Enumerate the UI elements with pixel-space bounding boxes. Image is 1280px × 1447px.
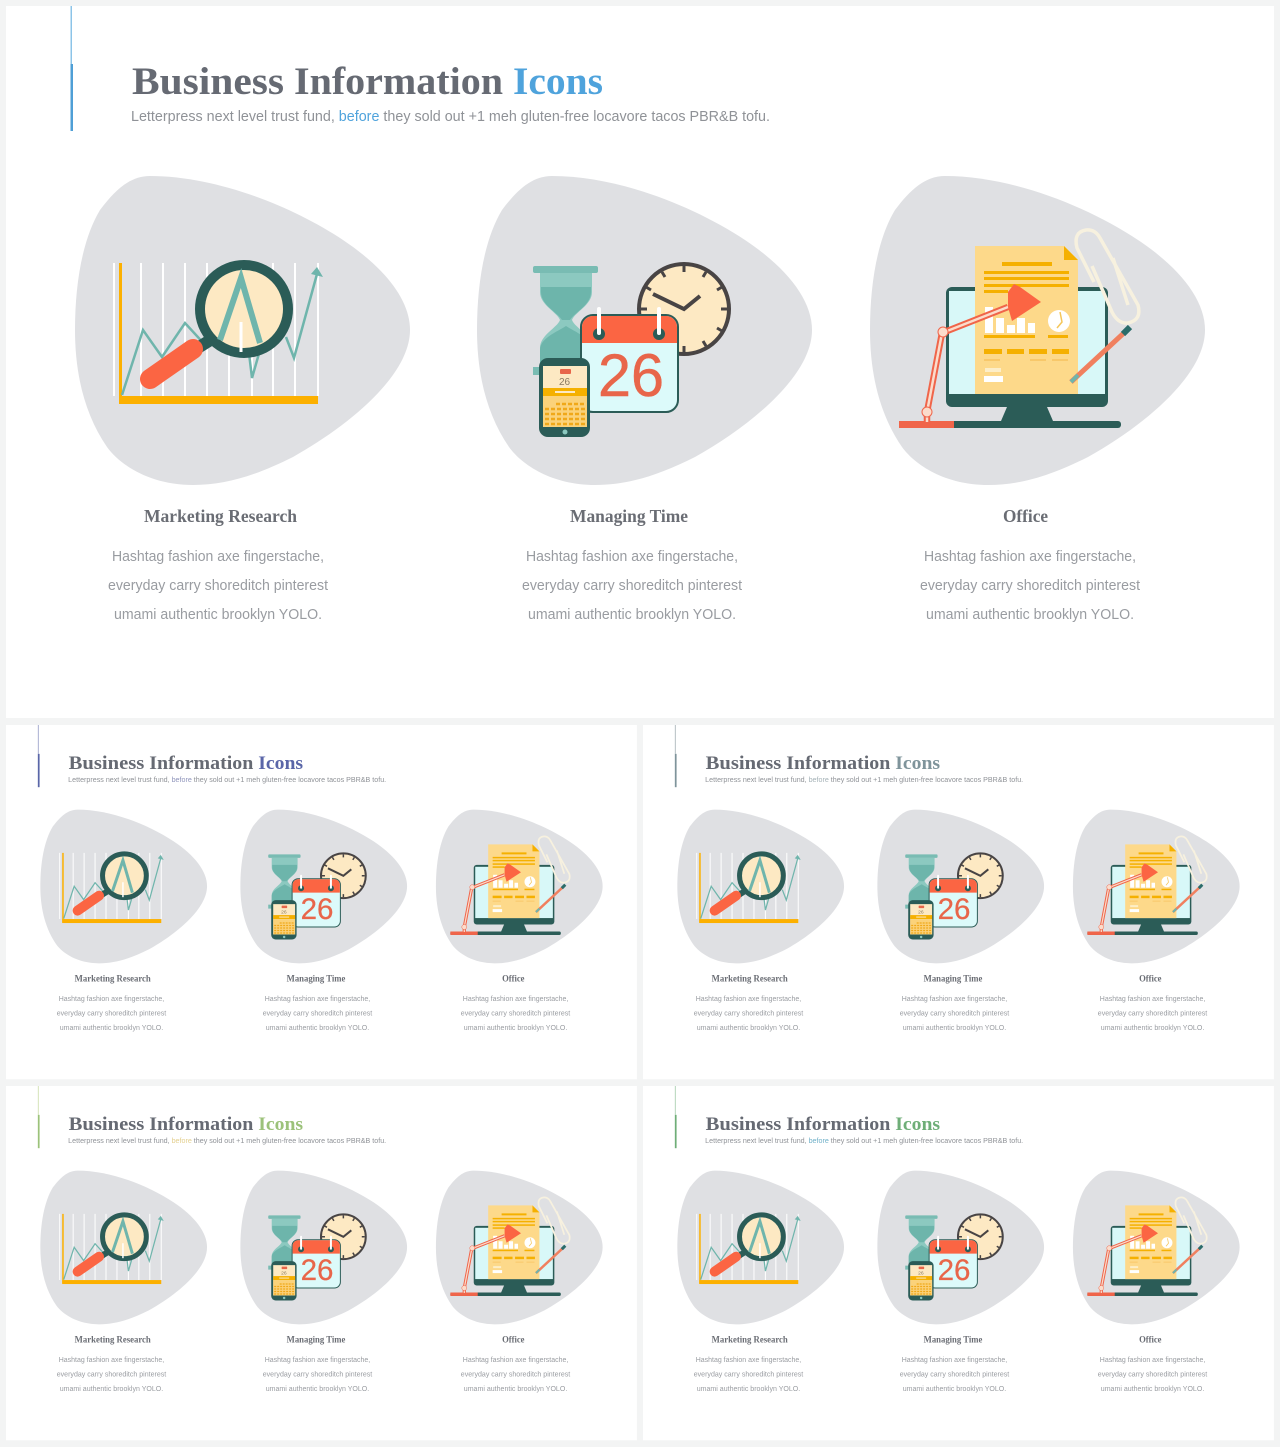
- text block: marketing research: umami authentic brooklyn YOLO.: [60, 1023, 163, 1032]
- text block: office: everyday carry shoreditch pinterest: [1098, 1009, 1207, 1018]
- text block: office: Hashtag fashion axe fingerstache,: [463, 994, 568, 1003]
- text block: managing time: umami authentic brooklyn YOLO.: [528, 607, 736, 623]
- text block: managing time: Hashtag fashion axe fingerstache,: [265, 994, 370, 1003]
- heading: office: Office: [1003, 506, 1048, 526]
- title: Icons: [895, 1114, 941, 1135]
- text block: marketing research: [694, 1355, 803, 1393]
- text block: office: [461, 994, 570, 1032]
- icon: managing time: [477, 176, 812, 485]
- text block: managing time: everyday carry shoreditch pinterest: [900, 1009, 1009, 1018]
- icon: managing time: 26: [281, 910, 287, 916]
- text block: marketing research: everyday carry shoreditch pinterest: [57, 1370, 166, 1379]
- icon: office: [870, 176, 1205, 485]
- text block: marketing research: everyday carry shoreditch pinterest: [694, 1009, 803, 1018]
- text block: managing time: Hashtag fashion axe fingerstache,: [526, 549, 738, 565]
- icon: managing time: 26: [559, 377, 571, 388]
- heading: managing time: Managing Time: [570, 506, 688, 526]
- icon: managing time: 26: [301, 1254, 333, 1287]
- panel: small slide lime: [6, 1086, 637, 1440]
- heading: marketing research: Marketing Research: [712, 974, 788, 984]
- text block: managing time: [263, 994, 372, 1032]
- title: Information: [786, 1114, 891, 1135]
- text block: managing time: everyday carry shoreditch pinterest: [522, 578, 742, 594]
- subtitle: Letterpress next level trust fund, before they sold out +1 meh gluten-free locavore tacos PBR&B tofu.: [68, 1136, 386, 1145]
- icon: managing time: 26: [918, 1271, 924, 1277]
- text block: office: umami authentic brooklyn YOLO.: [1101, 1023, 1204, 1032]
- panel: main slide blue: [6, 6, 1274, 718]
- accent bar: [70, 6, 73, 131]
- text block: office: [461, 1355, 570, 1393]
- text block: marketing research: everyday carry shoreditch pinterest: [108, 578, 328, 594]
- title: Information: [149, 1114, 254, 1135]
- subtitle: Letterpress next level trust fund, before they sold out +1 meh gluten-free locavore tacos PBR&B tofu.: [131, 109, 770, 125]
- title: Business: [69, 1114, 145, 1135]
- subtitle: Letterpress next level trust fund, before they sold out +1 meh gluten-free locavore tacos PBR&B tofu.: [705, 1136, 1023, 1145]
- subtitle: Letterpress next level trust fund, before they sold out +1 meh gluten-free locavore tacos PBR&B tofu.: [68, 775, 386, 784]
- heading: office: Office: [1139, 974, 1162, 984]
- text block: marketing research: [694, 994, 803, 1032]
- text block: managing time: Hashtag fashion axe fingerstache,: [265, 1355, 370, 1364]
- text block: managing time: everyday carry shoreditch pinterest: [263, 1009, 372, 1018]
- icon: managing time: [877, 810, 1044, 963]
- accent bar: [38, 725, 40, 787]
- text block: managing time: [263, 1355, 372, 1393]
- text block: office: everyday carry shoreditch pinterest: [461, 1370, 570, 1379]
- title: Information: [786, 753, 891, 774]
- text block: managing time: umami authentic brooklyn YOLO.: [266, 1384, 369, 1393]
- title: Information: [149, 753, 254, 774]
- accent bar: [675, 1086, 677, 1148]
- title: [69, 753, 304, 774]
- text block: managing time: [522, 549, 742, 623]
- text block: marketing research: [108, 549, 328, 623]
- text block: marketing research: Hashtag fashion axe fingerstache,: [59, 1355, 164, 1364]
- text block: managing time: [900, 994, 1009, 1032]
- title: Information: [294, 60, 503, 103]
- text block: marketing research: umami authentic brooklyn YOLO.: [114, 607, 322, 623]
- title: [706, 1114, 941, 1135]
- text block: office: [1098, 1355, 1207, 1393]
- text block: marketing research: Hashtag fashion axe fingerstache,: [59, 994, 164, 1003]
- icon: managing time: 26: [301, 893, 333, 926]
- text block: marketing research: umami authentic brooklyn YOLO.: [697, 1384, 800, 1393]
- heading: managing time: Managing Time: [924, 1335, 982, 1345]
- title: Business: [706, 1114, 782, 1135]
- text block: office: Hashtag fashion axe fingerstache,: [463, 1355, 568, 1364]
- title: Business: [132, 60, 284, 103]
- icon: managing time: 26: [598, 342, 664, 409]
- text block: managing time: Hashtag fashion axe fingerstache,: [902, 1355, 1007, 1364]
- text block: marketing research: everyday carry shoreditch pinterest: [694, 1370, 803, 1379]
- text block: managing time: umami authentic brooklyn YOLO.: [266, 1023, 369, 1032]
- heading: managing time: Managing Time: [924, 974, 982, 984]
- heading: office: Office: [502, 974, 525, 984]
- icon: office: [436, 810, 603, 963]
- heading: marketing research: Marketing Research: [75, 974, 151, 984]
- icon: managing time: 26: [281, 1271, 287, 1277]
- title: Icons: [258, 1114, 304, 1135]
- icon: managing time: [877, 1171, 1044, 1324]
- heading: managing time: Managing Time: [287, 1335, 345, 1345]
- text block: office: everyday carry shoreditch pinterest: [920, 578, 1140, 594]
- text block: marketing research: [57, 994, 166, 1032]
- icon: managing time: 26: [918, 910, 924, 916]
- text block: managing time: umami authentic brooklyn YOLO.: [903, 1384, 1006, 1393]
- text block: marketing research: [57, 1355, 166, 1393]
- title: [69, 1114, 304, 1135]
- text block: office: umami authentic brooklyn YOLO.: [1101, 1384, 1204, 1393]
- title: Business: [69, 753, 145, 774]
- text block: managing time: everyday carry shoreditch pinterest: [263, 1370, 372, 1379]
- text block: marketing research: everyday carry shoreditch pinterest: [57, 1009, 166, 1018]
- text block: office: [1098, 994, 1207, 1032]
- text block: office: everyday carry shoreditch pinterest: [461, 1009, 570, 1018]
- text block: managing time: umami authentic brooklyn YOLO.: [903, 1023, 1006, 1032]
- accent bar: [38, 1086, 40, 1148]
- text block: office: [920, 549, 1140, 623]
- text block: managing time: [900, 1355, 1009, 1393]
- text block: managing time: everyday carry shoreditch pinterest: [900, 1370, 1009, 1379]
- heading: managing time: Managing Time: [287, 974, 345, 984]
- text block: marketing research: umami authentic brooklyn YOLO.: [60, 1384, 163, 1393]
- text block: managing time: Hashtag fashion axe fingerstache,: [902, 994, 1007, 1003]
- text block: office: Hashtag fashion axe fingerstache,: [1100, 994, 1205, 1003]
- icon: marketing research: [677, 1171, 844, 1324]
- text block: marketing research: umami authentic brooklyn YOLO.: [697, 1023, 800, 1032]
- icon: managing time: [240, 1171, 407, 1324]
- text block: marketing research: Hashtag fashion axe fingerstache,: [696, 994, 801, 1003]
- heading: marketing research: Marketing Research: [712, 1335, 788, 1345]
- panel: small slide slate: [643, 725, 1274, 1079]
- icon: managing time: [240, 810, 407, 963]
- text block: office: Hashtag fashion axe fingerstache,: [1100, 1355, 1205, 1364]
- title: Icons: [258, 753, 304, 774]
- panel: small slide indigo: [6, 725, 637, 1079]
- title: [706, 753, 941, 774]
- icon: office: [1073, 1171, 1240, 1324]
- icon: marketing research: [40, 810, 207, 963]
- text block: office: umami authentic brooklyn YOLO.: [926, 607, 1134, 623]
- icon: marketing research: [75, 176, 410, 485]
- text block: office: Hashtag fashion axe fingerstache,: [924, 549, 1136, 565]
- icon: office: [436, 1171, 603, 1324]
- panel: small slide green: [643, 1086, 1274, 1440]
- accent bar: [675, 725, 677, 787]
- icon: managing time: 26: [938, 1254, 970, 1287]
- title: [132, 60, 603, 103]
- text block: marketing research: Hashtag fashion axe fingerstache,: [112, 549, 324, 565]
- heading: office: Office: [502, 1335, 525, 1345]
- heading: marketing research: Marketing Research: [75, 1335, 151, 1345]
- subtitle: Letterpress next level trust fund, before they sold out +1 meh gluten-free locavore tacos PBR&B tofu.: [705, 775, 1023, 784]
- text block: marketing research: Hashtag fashion axe fingerstache,: [696, 1355, 801, 1364]
- icon: managing time: 26: [938, 893, 970, 926]
- title: Icons: [895, 753, 941, 774]
- title: Icons: [513, 60, 603, 103]
- heading: office: Office: [1139, 1335, 1162, 1345]
- icon: office: [1073, 810, 1240, 963]
- text block: office: umami authentic brooklyn YOLO.: [464, 1023, 567, 1032]
- text block: office: umami authentic brooklyn YOLO.: [464, 1384, 567, 1393]
- title: Business: [706, 753, 782, 774]
- icon: marketing research: [40, 1171, 207, 1324]
- icon: marketing research: [677, 810, 844, 963]
- text block: office: everyday carry shoreditch pinterest: [1098, 1370, 1207, 1379]
- heading: marketing research: Marketing Research: [144, 506, 297, 526]
